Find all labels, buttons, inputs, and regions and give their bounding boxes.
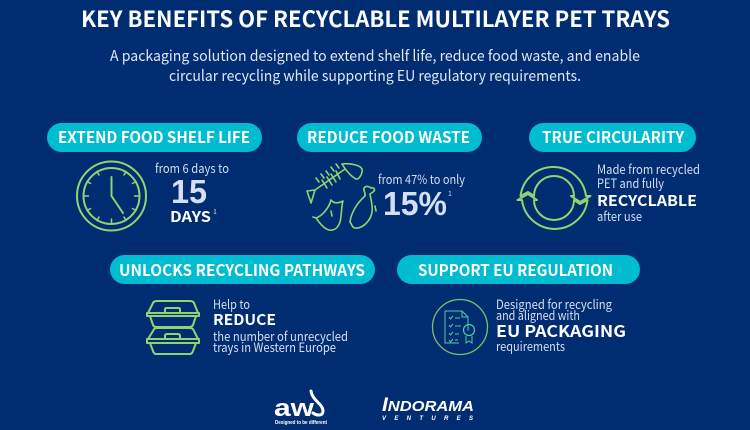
panel: reduce food waste bbox=[297, 123, 482, 230]
logo: awd: Designed to be different bbox=[275, 420, 327, 426]
text: reduce bbox=[213, 294, 348, 356]
icon: food waste bbox=[307, 164, 376, 230]
text: reduce: trays in Western Europe bbox=[213, 337, 336, 356]
text: eu packaging: requirements bbox=[496, 336, 565, 355]
logo: awd: aw bbox=[274, 395, 314, 422]
logo: indorama ventures: INDORAMA bbox=[382, 395, 474, 416]
stat: 15 percent: 15% bbox=[383, 185, 447, 222]
heading pill: true circularity: TRUE CIRCULARITY bbox=[542, 124, 685, 148]
text: eu packaging bbox=[496, 294, 626, 355]
stat: 15 days bbox=[155, 158, 229, 227]
icon: clock bbox=[77, 162, 146, 230]
subtitle bbox=[110, 45, 640, 86]
stat: 15 days: from 6 days to bbox=[155, 158, 229, 177]
heading pill: extend food shelf life: EXTEND FOOD SHELF LIFE bbox=[58, 124, 250, 148]
subtitle: circular recycling while supporting EU regulatory requirements. bbox=[169, 65, 581, 86]
heading pill: support eu regulation: SUPPORT EU REGULATION bbox=[418, 257, 613, 281]
stat: 15 days: 15 bbox=[171, 173, 207, 210]
icon: circular arrows bbox=[518, 167, 590, 229]
text: recyclable: after use bbox=[597, 206, 642, 225]
icon: stacked trays bbox=[147, 301, 199, 354]
logo: indorama ventures: VENTURES bbox=[382, 416, 473, 422]
text: recyclable bbox=[597, 159, 700, 225]
stat: 15 days: DAYS bbox=[170, 206, 211, 227]
fish skeleton bbox=[307, 164, 362, 203]
heading pill: reduce food waste: REDUCE FOOD WASTE bbox=[307, 124, 470, 148]
text: recyclable: Made from recycled bbox=[597, 159, 700, 178]
subtitle: A packaging solution designed to extend shelf life, reduce food waste, and enable bbox=[110, 45, 640, 66]
text: reduce: Help to bbox=[213, 294, 250, 313]
stat: 15 percent: 1 bbox=[448, 189, 452, 199]
title: KEY BENEFITS OF RECYCLABLE MULTILAYER PET TRAYS bbox=[81, 2, 670, 34]
text: eu packaging: EU PACKAGING bbox=[496, 318, 626, 342]
text: eu packaging: Designed for recycling bbox=[496, 294, 612, 313]
stat: 15 days: 1 bbox=[213, 207, 217, 217]
icon: compliance document bbox=[432, 300, 488, 354]
text: recyclable: RECYCLABLE bbox=[597, 190, 697, 211]
apple core bbox=[313, 200, 343, 230]
stat: 15 percent bbox=[378, 169, 465, 222]
panel: support eu regulation bbox=[397, 255, 640, 355]
text: reduce: REDUCE bbox=[213, 309, 276, 330]
panel: extend food shelf life bbox=[47, 123, 262, 230]
panel: true circularity bbox=[518, 123, 700, 229]
text: recyclable: PET and fully bbox=[597, 173, 664, 192]
drumstick bbox=[350, 186, 376, 228]
text: reduce: the number of unrecycled bbox=[213, 326, 348, 345]
logo: awd bbox=[274, 391, 327, 426]
text: eu packaging: and aligned with bbox=[496, 305, 580, 324]
panel: unlocks recycling pathways bbox=[110, 255, 375, 356]
stat: 15 percent: from 47% to only bbox=[378, 169, 465, 188]
heading pill: unlocks recycling pathways: UNLOCKS RECYCLING PATHWAYS bbox=[119, 257, 365, 281]
